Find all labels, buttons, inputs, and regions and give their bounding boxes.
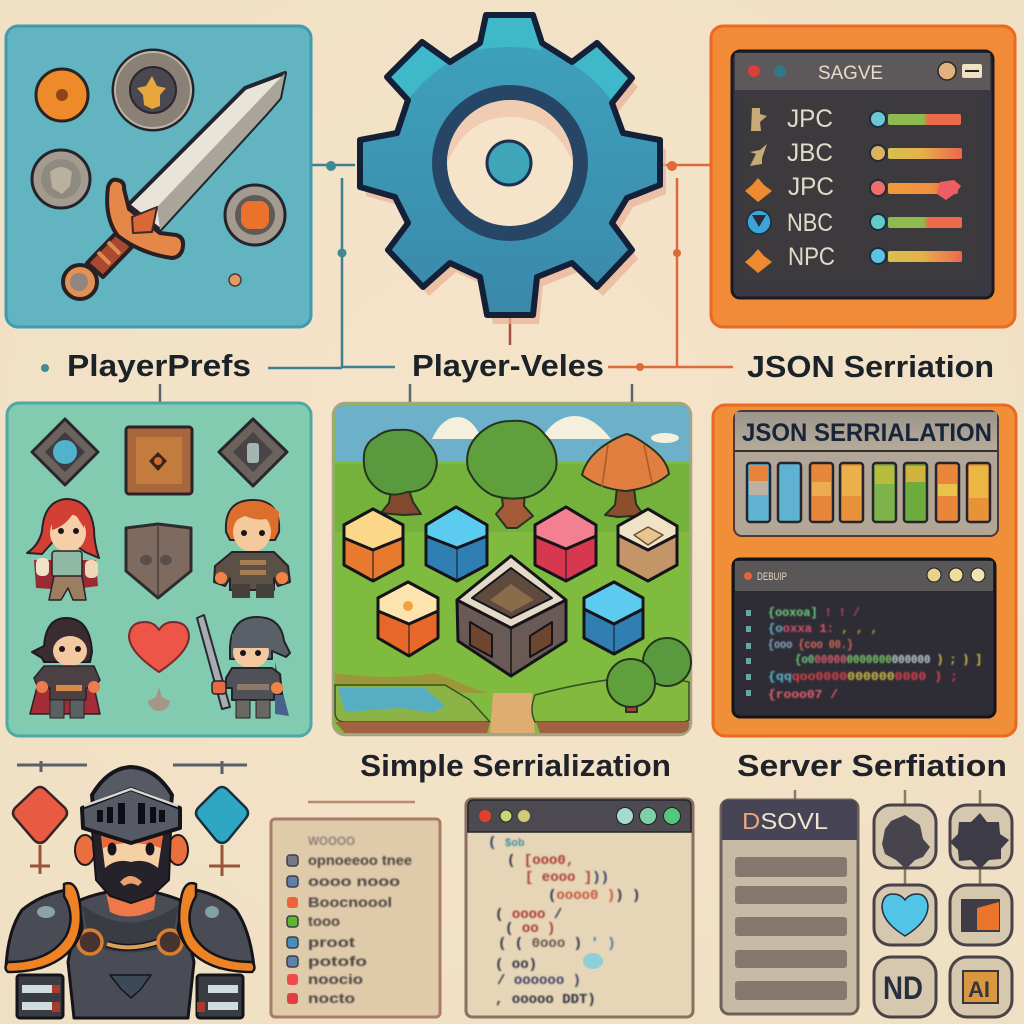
icon: brown shield [126, 524, 191, 598]
icon: wooden crate [126, 427, 192, 494]
code window: {ooxxa 1: , , , [768, 622, 878, 636]
list rows: JPC [787, 105, 833, 133]
code window: {rooo07 / [768, 688, 838, 702]
panel: item list: WOOOO [308, 834, 355, 848]
icon: grey shield medallion [32, 150, 90, 208]
banner with bars [734, 411, 998, 536]
panel: code editor: ( ( 0ooo ) ' ) [498, 936, 616, 952]
character: armoured knight [6, 767, 254, 1018]
icon: blue cube [426, 507, 487, 581]
icon: helmet lines left [17, 761, 87, 772]
neck [106, 893, 156, 917]
code window: DEBUIP [757, 571, 787, 583]
panel: item list: oooo nooo [308, 873, 400, 889]
character: ginger warrior [214, 500, 290, 598]
icon: tan cube [618, 509, 677, 581]
panel: code editor: ( oooo / [495, 907, 562, 923]
list rows: JBC [787, 139, 833, 167]
panel: code editor [466, 799, 693, 1017]
list rows: NPC [788, 243, 835, 271]
character: red hair [27, 499, 99, 600]
panel: item list: tooo [308, 913, 340, 929]
icon: AI badge [950, 957, 1012, 1017]
heading: Server Serfiation: Server Serfiation [737, 748, 1007, 783]
panel: code editor: [ eooo ])) [525, 870, 609, 886]
sky [335, 405, 689, 462]
clouds [432, 416, 679, 443]
panel: JSON serialization [713, 405, 1016, 736]
panel: item list: Boocnoool [308, 894, 392, 910]
icon: orange scroll badge [950, 885, 1012, 945]
icon: blue gem [32, 419, 98, 485]
right pauldron [178, 890, 254, 968]
shoulder rings [78, 930, 182, 954]
list rows: NBC [787, 209, 833, 237]
panel: item list: nocto [308, 990, 355, 1006]
icon: dark sun badge [950, 805, 1012, 869]
panel: DSOVL form [721, 800, 858, 1014]
panel: code editor: ( oo) [495, 957, 537, 973]
icon: heart badge [874, 885, 936, 945]
icon: stone well [457, 556, 566, 676]
beard [92, 830, 171, 903]
cubes [344, 507, 677, 656]
icon: AI badge: AI [968, 977, 990, 1002]
ears [75, 835, 95, 865]
icon: large gear [360, 15, 666, 324]
character: dark hair [30, 618, 100, 718]
icon: diamond badge [219, 419, 287, 486]
icon: small dot [229, 274, 241, 286]
icon: star medallion [113, 50, 193, 130]
heading: Player-Veles: Player-Veles [412, 348, 604, 383]
panel: item list [271, 819, 440, 1017]
window title [748, 62, 982, 84]
character: knight with sword [197, 615, 290, 718]
panel: code editor: , ooooo DDT) [495, 992, 596, 1008]
icon: dark star badge [874, 805, 936, 869]
panel: game world map [333, 403, 691, 735]
small trees [607, 638, 691, 712]
lower shore and river [335, 673, 490, 693]
panel: code editor: ( oo ) [505, 921, 555, 937]
code window [733, 559, 995, 717]
icon: red diamond [13, 787, 67, 874]
panel: save window NPC list [711, 26, 1015, 327]
panel: code editor: / oooooo ) [497, 973, 581, 989]
panel: DSOVL form: DSOVL [742, 808, 828, 834]
icon: heart [129, 622, 189, 711]
list rows [787, 105, 835, 271]
icon: light blue cube [584, 582, 643, 654]
code window: {o0000000000000000000 ) ; ) ] [795, 653, 982, 667]
trees [364, 421, 669, 528]
colour bars [747, 463, 990, 522]
icon: orange coin [36, 69, 88, 121]
panel: item list: proot [308, 934, 355, 950]
code window: {ooo {coo 00.} [768, 638, 853, 652]
heading: JSON Serriation: JSON Serriation [747, 349, 994, 384]
code window: {qqqoo0000 000000 0000 ) ; [768, 670, 958, 684]
panel: characters and items [7, 403, 311, 736]
icon: amber cube [344, 509, 403, 581]
connector lines [41, 161, 980, 885]
helmet [92, 767, 172, 815]
heading: Simple Serrialization: Simple Serrialization [360, 748, 671, 783]
icon: pink cube [535, 507, 596, 581]
icon: helmet lines right [173, 761, 247, 774]
icon: sword [63, 73, 285, 299]
window title: SAGVE [818, 63, 883, 84]
blue blob [583, 953, 603, 969]
torso [68, 890, 194, 1018]
heading: PlayerPrefs: PlayerPrefs [67, 348, 251, 383]
list rows: JPC [788, 173, 834, 201]
row icons and bars [745, 108, 962, 273]
banner title: JSON SERRIALATION [742, 419, 992, 447]
icon: ND badge [874, 957, 936, 1017]
icon: teal diamond [196, 787, 248, 876]
panel: code editor: (oooo0 )) ) [548, 888, 640, 904]
panel: PlayerPrefs items [6, 26, 311, 327]
panel: item list: noocio [308, 971, 363, 987]
left pauldron [6, 890, 82, 968]
panel: item list: opnoeeoo tnee [308, 852, 412, 868]
panel: code editor: ( [ooo0, [507, 853, 574, 869]
icon: ND badge: ND [883, 970, 923, 1006]
face [101, 835, 163, 868]
panel: code editor: ( $ob [488, 835, 525, 851]
icon: orange cube [378, 582, 438, 656]
panel: item list: potofo [308, 953, 367, 969]
icon grid [874, 805, 1012, 1017]
code window: {ooxoa] ! ! / [768, 606, 860, 620]
icon: orange gem medallion [225, 185, 285, 245]
arms [17, 975, 243, 1018]
